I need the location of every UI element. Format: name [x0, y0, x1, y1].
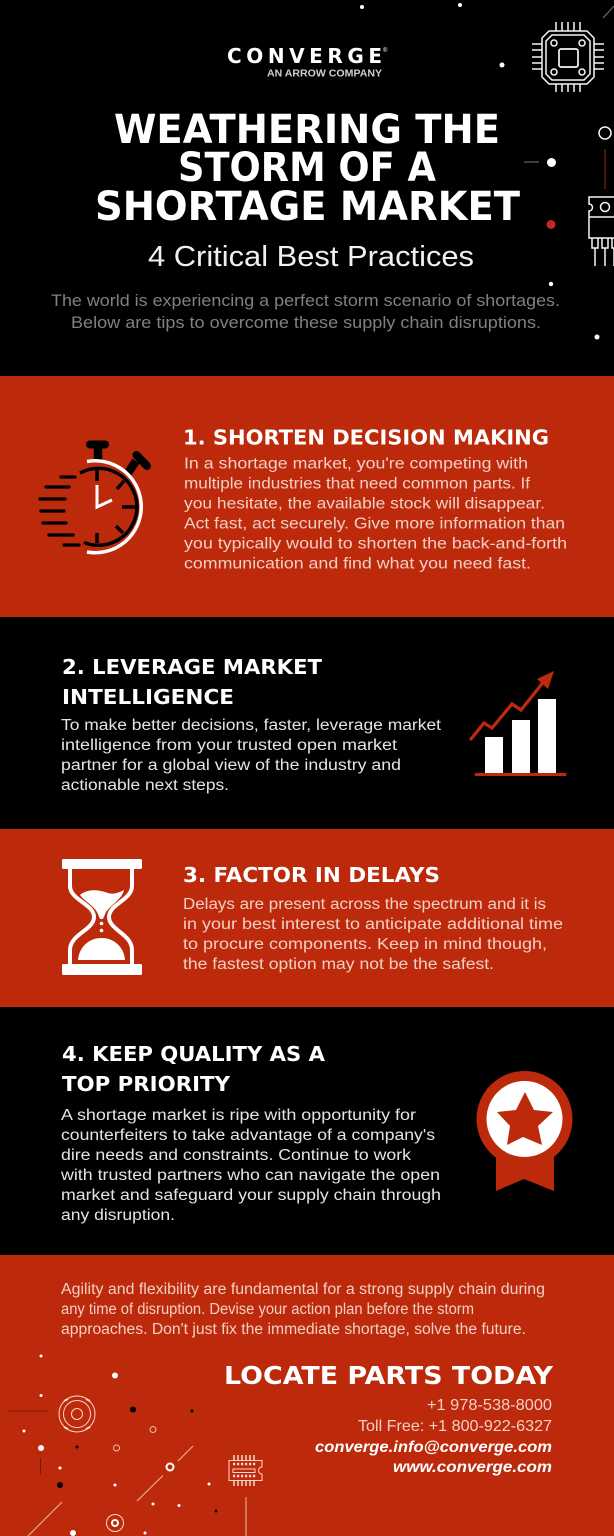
contact details: Toll Free: +1 800-922-6327 [358, 1418, 552, 1435]
body text: intelligence from your trusted open market [61, 737, 398, 754]
heading: 3. FACTOR IN DELAYS [183, 863, 440, 887]
icon: concentric circle [106, 1514, 124, 1532]
icon: integrated circuit [229, 1455, 262, 1486]
icon: award ribbon [476, 1071, 572, 1191]
panel: header [0, 0, 614, 376]
title [95, 107, 521, 230]
body text: market and safeguard your supply chain through [61, 1187, 441, 1204]
header decorations [360, 3, 614, 340]
heading: INTELLIGENCE [62, 685, 234, 709]
body text [61, 717, 442, 794]
logo: Converge: CONVERGE [227, 44, 382, 68]
heading [62, 655, 322, 709]
heading: TOP PRIORITY [62, 1072, 231, 1096]
title: STORM OF A [178, 145, 436, 191]
contact details: www.converge.com [393, 1459, 552, 1476]
subtitle: 4 Critical Best Practices [148, 241, 474, 273]
body text: counterfeiters to take advantage of a company's [61, 1127, 435, 1144]
body text: any disruption. [61, 1207, 175, 1224]
icon: hourglass [62, 859, 142, 975]
intro text [51, 291, 560, 332]
logo: Converge [227, 44, 388, 80]
panel: 2. leverage market intelligence [0, 617, 614, 829]
closing text: any time of disruption. Devise your action plan before the storm [61, 1301, 474, 1318]
body text: dire needs and constraints. Continue to work [61, 1147, 411, 1164]
body text [60, 1107, 441, 1224]
closing text: approaches. Don't just fix the immediate shortage, solve the future. [61, 1321, 526, 1338]
icon: transistor [589, 127, 614, 266]
body text: to procure components. Keep in mind though, [183, 936, 547, 953]
logo: Converge: ® [383, 47, 388, 54]
icon: microchip [532, 22, 604, 92]
heading: 2. LEVERAGE MARKET [62, 655, 322, 679]
body text: A shortage market is ripe with opportunity for [61, 1107, 416, 1124]
panel: closing call to action [0, 1255, 614, 1536]
heading: 4. KEEP QUALITY AS A [62, 1042, 325, 1066]
body text: In a shortage market, you're competing with [184, 456, 528, 472]
closing text: Agility and flexibility are fundamental for a strong supply chain during [61, 1281, 545, 1298]
body text: Delays are present across the spectrum and it is [183, 896, 546, 913]
body text: in your best interest to anticipate additional time [183, 916, 563, 933]
body text [184, 456, 567, 572]
body text: multiple industries that need common parts. If [184, 476, 531, 492]
body text: the fastest option may not be the safest. [183, 956, 494, 973]
body text: you hesitate, the available stock will disappear. [184, 496, 545, 512]
body text: Act fast, act securely. Give more information than [184, 516, 565, 532]
icon: speaker [59, 1396, 95, 1432]
contact details [315, 1397, 552, 1476]
heading [62, 1042, 325, 1096]
icon: stopwatch [40, 444, 147, 553]
body text [183, 896, 563, 973]
body text: To make better decisions, faster, leverage market [61, 717, 442, 734]
body text: with trusted partners who can navigate the open [60, 1167, 440, 1184]
heading: 1. SHORTEN DECISION MAKING [183, 426, 549, 450]
intro text: Below are tips to overcome these supply chain disruptions. [71, 313, 541, 332]
contact details: converge.info@converge.com [315, 1439, 552, 1456]
logo: Converge: AN ARROW COMPANY [267, 68, 382, 80]
body text: actionable next steps. [61, 777, 229, 794]
body text: communication and find what you need fast. [184, 556, 531, 572]
title: SHORTAGE MARKET [95, 184, 521, 230]
contact details: +1 978-538-8000 [427, 1397, 552, 1414]
panel: 1. shorten decision making [0, 376, 614, 617]
panel: 3. factor in delays [0, 829, 614, 1007]
heading: locate parts today: LOCATE PARTS TODAY [224, 1361, 554, 1390]
intro text: The world is experiencing a perfect storm scenario of shortages. [51, 291, 560, 310]
body text: you typically would to shorten the back-and-forth [184, 536, 567, 552]
panel: 4. keep quality as a top priority [0, 1007, 614, 1255]
title: WEATHERING THE [114, 107, 500, 153]
footer decorations [9, 1354, 246, 1536]
icon: rising bar chart [471, 671, 565, 774]
closing text [61, 1281, 545, 1338]
body text: partner for a global view of the industry and [61, 757, 401, 774]
